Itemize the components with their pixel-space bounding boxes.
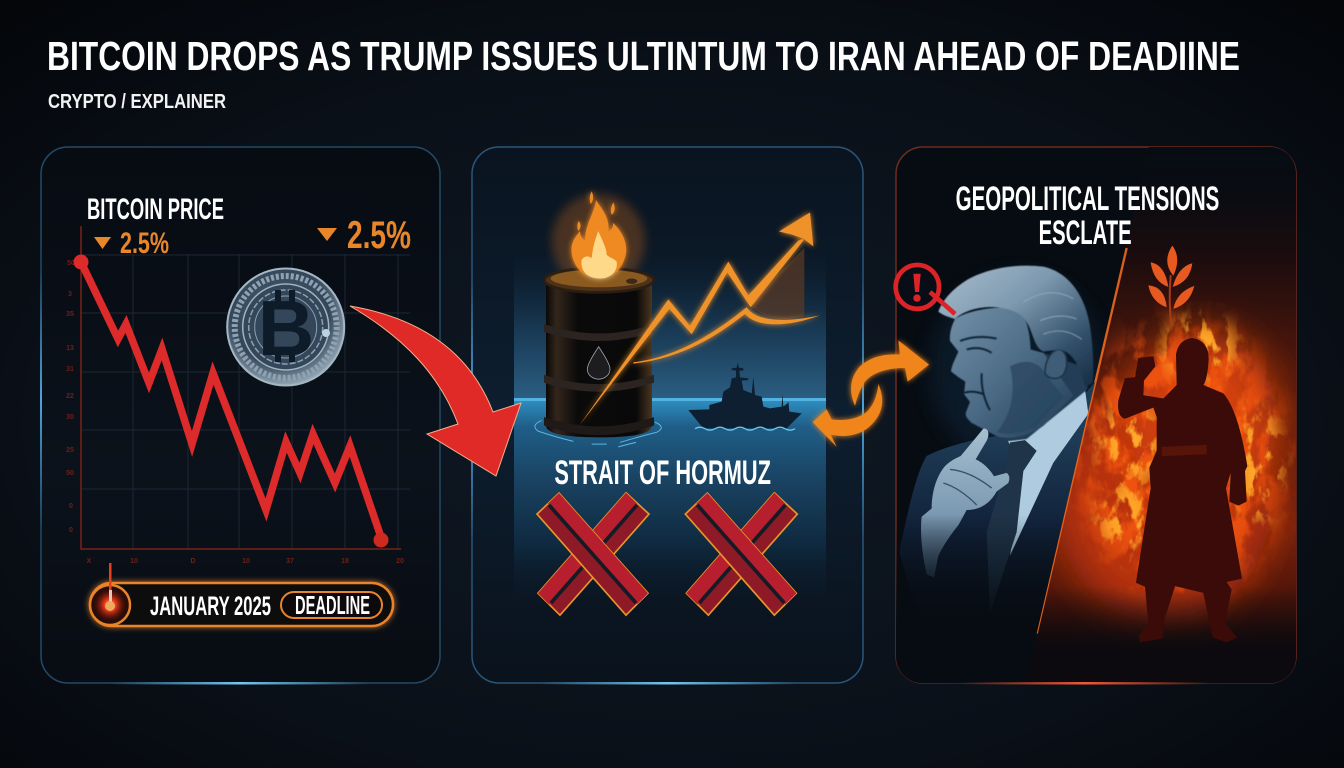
timer dot [90, 563, 130, 625]
rising price arrow [579, 213, 820, 426]
sky gradient [514, 250, 826, 399]
bright flames right [1233, 407, 1280, 522]
head [938, 266, 1093, 441]
y axis labels: 35 [66, 311, 74, 318]
start point [74, 254, 88, 270]
panel frame [472, 147, 863, 683]
lower fade [896, 515, 1063, 691]
small change indicator: 2.5% [120, 227, 169, 260]
x axis labels: 20 [396, 558, 404, 565]
ripples around barrel [535, 420, 661, 447]
y axis labels: 3 [68, 291, 72, 298]
shirt collar [1007, 389, 1088, 556]
y axis labels: 31 [66, 366, 74, 373]
y axis labels: 25 [66, 447, 74, 454]
deadline badge: DEADLINE [295, 590, 370, 620]
suit [899, 380, 1097, 688]
trump figure [896, 266, 1097, 691]
small change indicator [94, 227, 169, 260]
icon: oil drop [587, 347, 610, 379]
eye, brow and mouth [960, 337, 997, 410]
y axis labels: 13 [66, 345, 74, 352]
heading: geopolitical tensions: ESCLATE [1039, 215, 1132, 252]
panel: bitcoin price [40, 147, 440, 684]
pill glow and outline [90, 583, 393, 626]
arrow: orange exchange arrows [813, 340, 929, 447]
y axis labels: 50 [66, 470, 74, 477]
icon: oil barrel [544, 268, 654, 437]
panel frame [41, 147, 440, 683]
finger creases [943, 469, 992, 505]
icon: flame [571, 191, 626, 278]
bright flames top [1163, 319, 1237, 380]
x axis labels: 10 [242, 558, 250, 565]
lower fade [1026, 589, 1296, 684]
ear [1045, 349, 1067, 378]
y axis labels: 0 [69, 527, 73, 534]
deadline pill [90, 563, 393, 626]
icon: crossed bars 1 [537, 493, 649, 615]
icon: plant [1148, 246, 1194, 327]
upper arrow [851, 340, 929, 406]
fire half [1017, 143, 1303, 691]
large change indicator [317, 214, 411, 257]
area under rising line [748, 248, 804, 319]
chart grid [81, 254, 410, 549]
hair strands [1023, 293, 1082, 339]
chart axes [81, 226, 401, 549]
x axis labels: 10 [130, 558, 138, 565]
bright flames left lower [1098, 481, 1155, 556]
heading: bitcoin price: BITCOIN PRICE [87, 193, 224, 226]
date text: JANUARY 2025 [150, 591, 271, 621]
blue atmosphere [929, 307, 1102, 444]
diagonal divider [1037, 248, 1127, 633]
icon: alert magnifier [896, 265, 955, 314]
icon: crossed bars 2 [685, 493, 797, 615]
x axis labels: 37 [286, 558, 294, 565]
x axis labels [87, 558, 404, 565]
x axis labels: 18 [341, 558, 349, 565]
y axis labels: 0 [69, 503, 73, 510]
y axis labels: 22 [66, 393, 74, 400]
sea [514, 399, 826, 611]
y axis labels: 30 [66, 414, 74, 421]
face [950, 307, 1073, 438]
deadline badge [281, 590, 382, 620]
y axis labels: 50 [67, 260, 75, 267]
barrel glow [552, 194, 645, 289]
y axis labels [66, 260, 75, 534]
necktie [987, 440, 1037, 613]
lower arrow [813, 384, 882, 447]
end point [374, 532, 388, 548]
x axis labels: X [87, 558, 92, 565]
hand [921, 429, 1009, 578]
panel: strait of hormuz [471, 147, 864, 684]
water line [514, 398, 826, 401]
hair [938, 266, 1093, 387]
panel bottom glow [960, 682, 1210, 684]
subtitle: CRYPTO / EXPLAINER [48, 91, 226, 113]
icon: bitcoin coin: B [258, 284, 314, 372]
flame streaks [1083, 329, 1277, 593]
heading: strait of hormuz: STRAIT OF HORMUZ [554, 455, 771, 492]
price line [81, 262, 382, 540]
cheek shadow [997, 362, 1063, 434]
neck [970, 353, 1092, 441]
panel frame [896, 147, 1296, 683]
red smoke [1057, 380, 1270, 623]
icon: warship [688, 363, 802, 430]
line chart [66, 226, 410, 565]
silhouette: robed figure [1118, 338, 1247, 642]
large change indicator: 2.5% [347, 214, 411, 257]
panel: geopolitical tensions [896, 143, 1303, 691]
x axis labels: D [190, 558, 196, 565]
icon: bitcoin coin [227, 268, 344, 386]
heading: geopolitical tensions [956, 181, 1219, 252]
arrow: red curved down arrow [350, 306, 521, 476]
bright flames left upper [1098, 404, 1162, 485]
